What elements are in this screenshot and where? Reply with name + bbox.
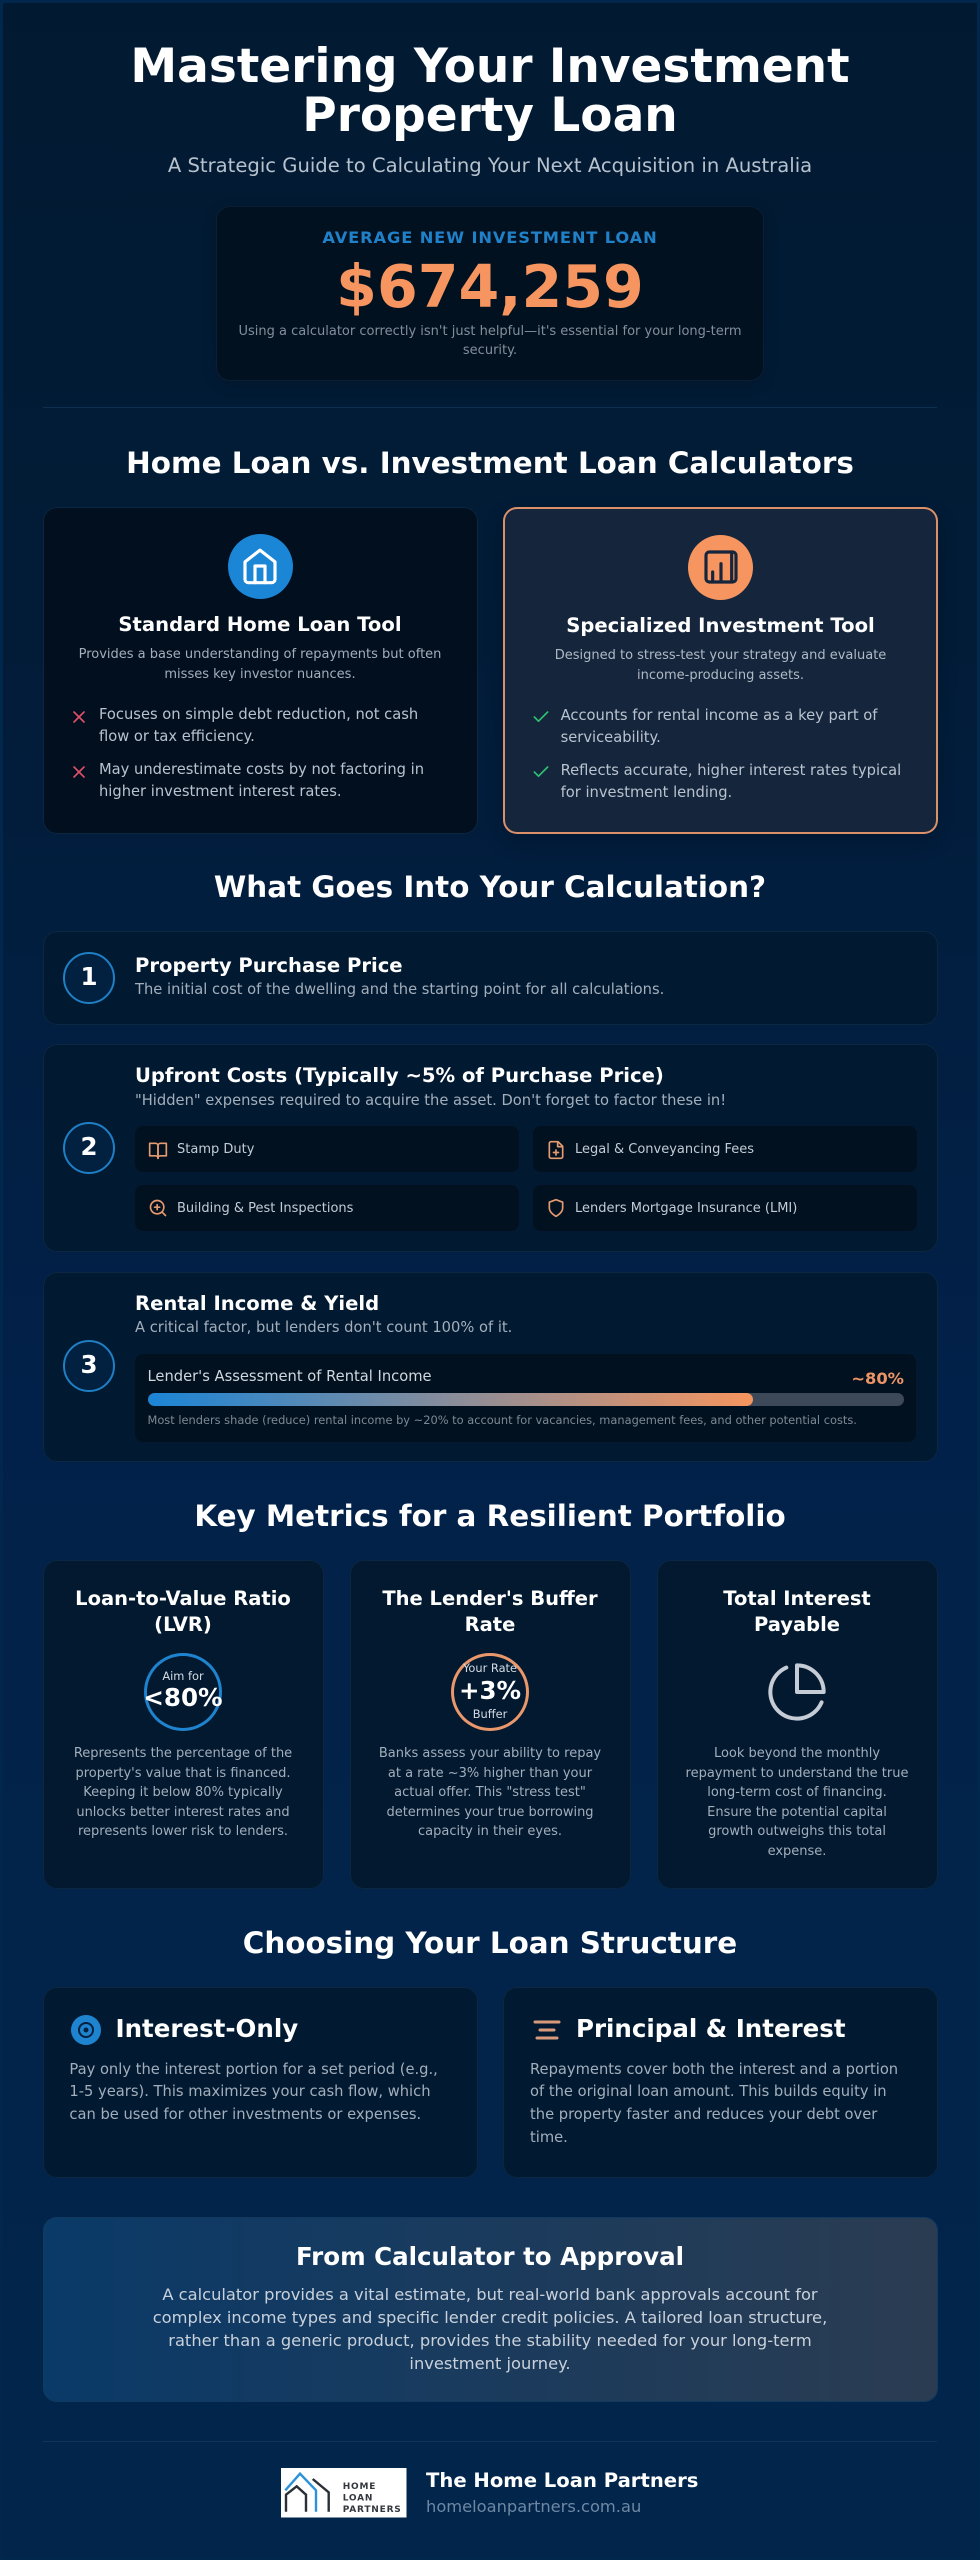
metric description xyxy=(74,1746,292,1839)
cost: inspections xyxy=(135,1185,519,1231)
step title: Upfront Costs (Typically ~5% of Purchase Price) xyxy=(135,1064,664,1087)
metric description: capacity in their eyes. xyxy=(418,1824,562,1839)
subtitle: A Strategic Guide to Calculating Your Next Acquisition in Australia xyxy=(168,154,812,177)
stat label: AVERAGE NEW INVESTMENT LOAN xyxy=(322,228,658,247)
bar note: Most lenders shade (reduce) rental income by ~20% to account for vacancies, management fees, and other potential costs. xyxy=(148,1413,857,1427)
footer xyxy=(281,2468,698,2518)
metric title: Rate xyxy=(465,1613,515,1636)
check icon 2 xyxy=(534,766,548,777)
metric description: expense. xyxy=(768,1844,826,1859)
drawback 2: May underestimate costs by not factoring in xyxy=(99,760,424,778)
rental income bar chart xyxy=(135,1354,916,1442)
panel: step 3 xyxy=(42,1272,938,1462)
callout body xyxy=(153,2285,827,2373)
company name: The Home Loan Partners xyxy=(426,2469,698,2492)
cost: legal fees xyxy=(532,1126,916,1172)
stat note: Using a calculator correctly isn't just helpful—it's essential for your long-term xyxy=(238,324,742,338)
panel: step 2 xyxy=(42,1044,938,1252)
callout body: complex income types and specific lender credit policies. A tailored loan structure, xyxy=(153,2308,827,2327)
logo: HOME xyxy=(343,2482,376,2492)
title: Mastering Your Investment xyxy=(130,39,850,94)
icon: chart xyxy=(688,534,753,600)
callout body: rather than a generic product, provides the stability needed for your long-term xyxy=(168,2331,812,2350)
cost: LMI xyxy=(532,1185,916,1231)
icon: book xyxy=(148,1142,168,1160)
option description xyxy=(69,2060,438,2123)
metric description: growth outweighs this total xyxy=(708,1824,886,1839)
heading: metrics: Key Metrics for a Resilient Portfolio xyxy=(194,1499,786,1533)
logo xyxy=(281,2468,406,2518)
step number 1 xyxy=(63,952,115,1004)
card description xyxy=(555,648,886,682)
panel: principal and interest xyxy=(503,1986,938,2178)
title xyxy=(130,39,850,143)
option description xyxy=(530,2060,898,2146)
step number 2 xyxy=(63,1122,115,1174)
benefit 2: for investment lending. xyxy=(561,784,732,801)
bar track and fill xyxy=(148,1392,904,1406)
option title: Interest-Only xyxy=(116,2014,298,2043)
metric title xyxy=(723,1587,871,1636)
stat note: security. xyxy=(463,343,517,358)
benefit 2: Reflects accurate, higher interest rates typical xyxy=(561,762,901,778)
metric description: long-term cost of financing. xyxy=(707,1785,887,1800)
benefit 1: Accounts for rental income as a key part of xyxy=(561,706,877,724)
bar value: ~80% xyxy=(851,1369,904,1388)
metric description: Look beyond the monthly xyxy=(714,1746,880,1761)
panel: total interest metric xyxy=(656,1560,938,1889)
metric description: Keeping it below 80% typically xyxy=(83,1785,283,1800)
icon: target xyxy=(71,2015,101,2045)
gauge value: +3% xyxy=(459,1676,521,1705)
benefit 1: serviceability. xyxy=(561,729,661,746)
bar label: Lender's Assessment of Rental Income xyxy=(148,1368,432,1385)
gauge: buffer xyxy=(451,1653,529,1731)
label: Lenders Mortgage Insurance (LMI) xyxy=(575,1201,797,1216)
metric description: Ensure the potential capital xyxy=(707,1805,887,1820)
step number 2: 2 xyxy=(80,1132,98,1160)
option title: Principal & Interest xyxy=(576,2014,846,2043)
logo: LOAN xyxy=(343,2494,373,2504)
card heading: Standard Home Loan Tool xyxy=(118,612,402,636)
metric description: unlocks better interest rates and xyxy=(76,1805,290,1820)
metric title: Total Interest xyxy=(723,1587,871,1610)
metric title: Loan-to-Value Ratio xyxy=(75,1587,291,1610)
label: Legal & Conveyancing Fees xyxy=(575,1142,754,1157)
icon: lines xyxy=(534,2020,560,2040)
icon: pie chart xyxy=(768,1663,826,1721)
step description: The initial cost of the dwelling and the starting point for all calculations. xyxy=(135,981,664,998)
gauge caption: Aim for xyxy=(162,1669,204,1683)
metric title xyxy=(75,1587,291,1636)
drawback 1 xyxy=(99,706,418,745)
icon: house xyxy=(228,534,292,598)
metric description: Represents the percentage of the xyxy=(74,1746,292,1761)
panel: interest-only xyxy=(42,1986,478,2178)
metric title: Payable xyxy=(754,1613,840,1636)
option description: can be used for other investments or expenses. xyxy=(69,2106,421,2123)
card description xyxy=(79,647,441,682)
panel: buffer rate metric xyxy=(350,1560,630,1889)
icon: shield xyxy=(548,1198,564,1218)
option description: of the original loan amount. This builds equity in xyxy=(530,2083,887,2100)
option description: the property faster and reduces your debt over xyxy=(530,2106,877,2123)
callout body: A calculator provides a vital estimate, but real-world bank approvals account for xyxy=(162,2285,818,2304)
panel: standard home loan tool xyxy=(42,506,478,834)
metric title: The Lender's Buffer xyxy=(382,1587,598,1610)
option description: Repayments cover both the interest and a portion xyxy=(530,2060,898,2078)
panel: LVR metric xyxy=(42,1560,324,1889)
icon: file plus xyxy=(548,1140,564,1160)
panel: specialized investment tool xyxy=(503,506,938,834)
metric description: Banks assess your ability to repay xyxy=(379,1746,601,1761)
gauge value: <80% xyxy=(143,1683,223,1712)
cost: stamp duty xyxy=(135,1126,519,1172)
label: Building & Pest Inspections xyxy=(177,1201,353,1216)
benefit 1 xyxy=(560,706,878,746)
gauge caption bottom: Buffer xyxy=(473,1707,507,1721)
callout body: investment journey. xyxy=(409,2354,571,2373)
panel: call to action xyxy=(42,2217,938,2402)
check icon 1 xyxy=(534,711,548,722)
card description: Provides a base understanding of repayments but often xyxy=(79,647,441,662)
stat note xyxy=(238,324,742,358)
card description: misses key investor nuances. xyxy=(164,666,356,682)
drawback 1: Focuses on simple debt reduction, not cash xyxy=(99,706,418,722)
step description: "Hidden" expenses required to acquire the asset. Don't forget to factor these in! xyxy=(135,1092,726,1109)
card description: income-producing assets. xyxy=(637,668,804,682)
metric title: (LVR) xyxy=(154,1613,212,1636)
card heading: Specialized Investment Tool xyxy=(566,614,875,636)
option description: Pay only the interest portion for a set period (e.g., xyxy=(69,2060,438,2078)
metric description: represents lower risk to lenders. xyxy=(78,1824,288,1839)
drawback 2 xyxy=(99,760,424,800)
metric title xyxy=(382,1587,598,1636)
drawback 1: flow or tax efficiency. xyxy=(99,728,255,745)
title: Property Loan xyxy=(302,88,678,143)
heading: calculators: Home Loan vs. Investment Loan Calculators xyxy=(126,446,854,480)
callout heading: From Calculator to Approval xyxy=(296,2242,684,2271)
panel: average loan stat xyxy=(216,206,764,381)
website: homeloanpartners.com.au xyxy=(426,2497,641,2516)
metric description: actual offer. This "stress test" xyxy=(394,1785,586,1800)
stat value: $674,259 xyxy=(336,253,644,321)
step number 3: 3 xyxy=(80,1350,98,1379)
benefit 2 xyxy=(560,762,901,801)
option description: 1-5 years). This maximizes your cash flow, which xyxy=(69,2083,431,2100)
step number 1: 1 xyxy=(80,962,98,990)
card description: Designed to stress-test your strategy and evaluate xyxy=(555,648,886,663)
gauge: LVR xyxy=(144,1653,222,1731)
metric description: property's value that is financed. xyxy=(76,1766,290,1781)
cross icon 2 xyxy=(73,766,85,778)
step title: Rental Income & Yield xyxy=(135,1292,379,1315)
step title: Property Purchase Price xyxy=(135,954,403,977)
gauge caption top: Your Rate xyxy=(463,1661,517,1675)
step number 3 xyxy=(63,1340,115,1392)
drawback 2: higher investment interest rates. xyxy=(99,783,342,800)
label: Stamp Duty xyxy=(177,1142,254,1157)
logo: PARTNERS xyxy=(343,2505,402,2515)
heading: calculation: What Goes Into Your Calculation? xyxy=(214,870,766,904)
metric description xyxy=(379,1746,601,1839)
step description: A critical factor, but lenders don't count 100% of it. xyxy=(135,1319,512,1336)
metric description: repayment to understand the true xyxy=(686,1766,908,1781)
metric description: determines your true borrowing xyxy=(386,1805,594,1820)
metric description: at a rate ~3% higher than your xyxy=(388,1766,592,1781)
metric description xyxy=(686,1746,908,1859)
icon: magnifier xyxy=(150,1200,166,1216)
option description: time. xyxy=(530,2129,568,2146)
panel: step 1 xyxy=(42,931,938,1024)
heading: structure: Choosing Your Loan Structure xyxy=(243,1926,737,1960)
cross icon 1 xyxy=(73,711,85,723)
